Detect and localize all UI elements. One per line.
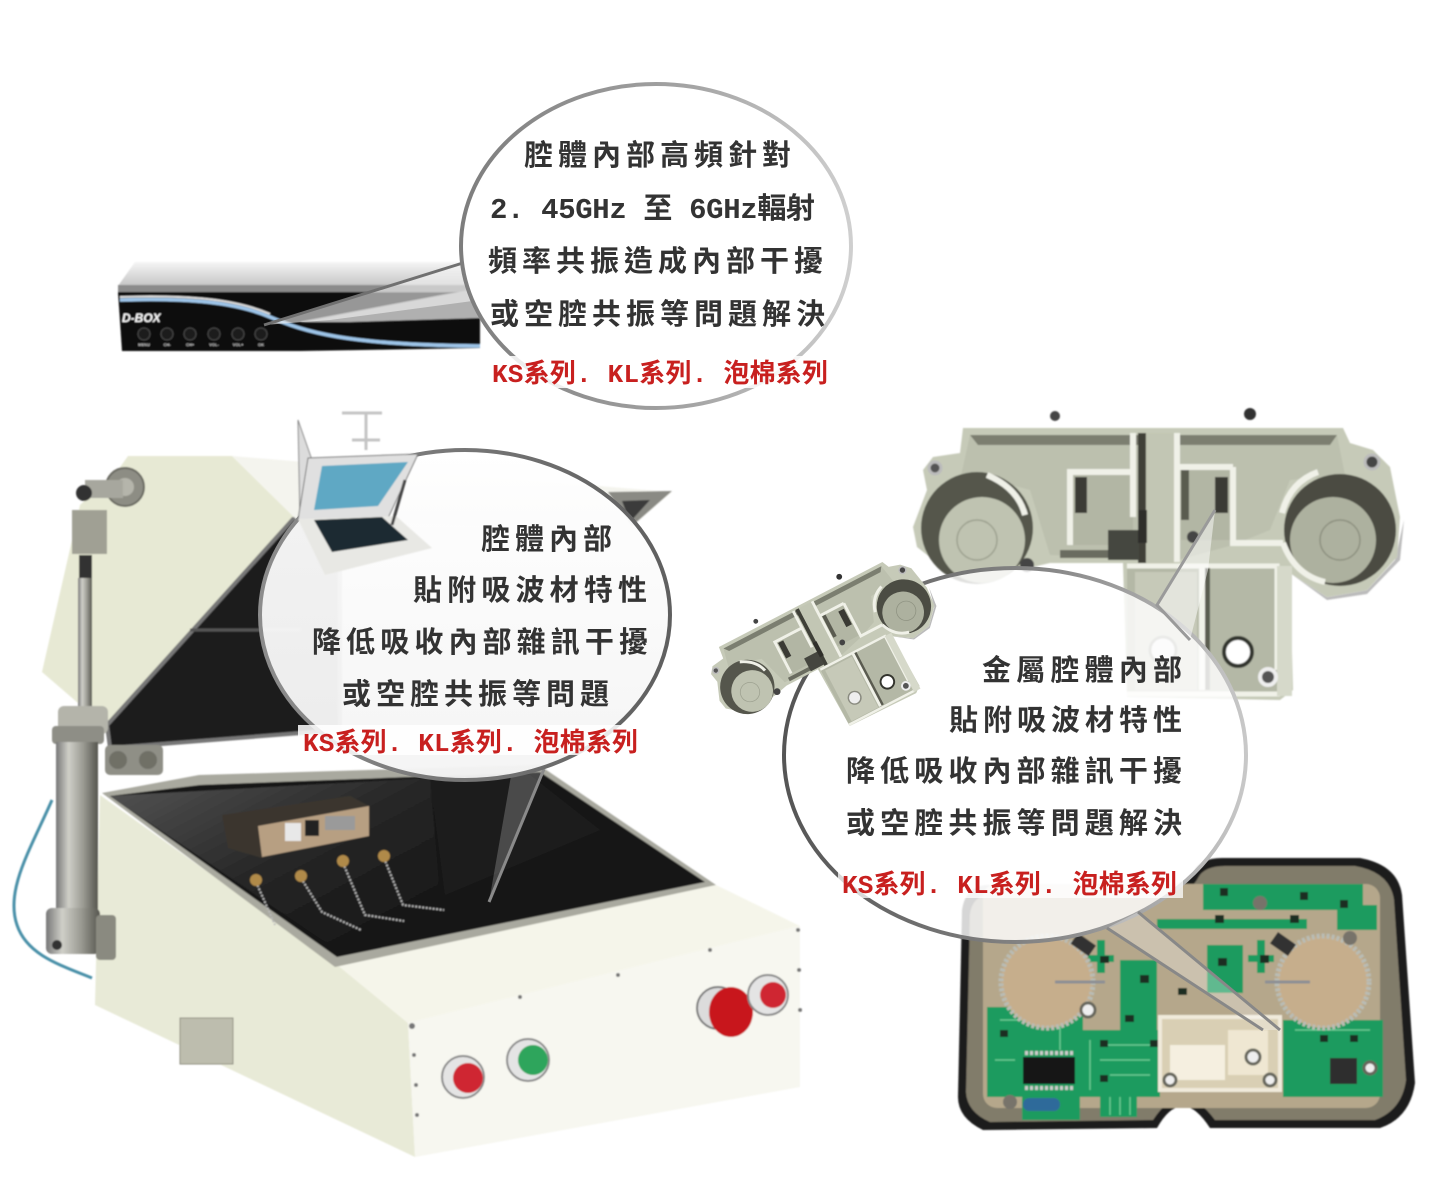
- body top surface: [335, 885, 800, 1023]
- bubble text: 2. 45GHz 至 6GHz輻射: [490, 192, 815, 227]
- callout: left speech bubble: [260, 413, 670, 902]
- bubble text: 頻率共振造成內部干擾: [488, 245, 823, 278]
- lid upper rim: [232, 456, 672, 530]
- band behind red text: [298, 725, 643, 755]
- button labels: CH-: [163, 342, 171, 347]
- body left side: [95, 795, 415, 1157]
- device in chamber: [222, 796, 369, 858]
- lid interior: [107, 519, 340, 748]
- bubble text: 腔體內部: [481, 523, 612, 556]
- bubble text: 或空腔共振等問題解決: [846, 807, 1182, 840]
- photo: metal cavity small: [693, 540, 970, 775]
- bubble text: 或空腔共振等問題: [342, 678, 609, 711]
- button labels: VOL+: [233, 342, 244, 347]
- bubble text: KS系列. KL系列. 泡棉系列: [303, 728, 638, 759]
- highlight band behind red text: [838, 868, 1183, 898]
- bubble text: 降低吸收內部雜訊干擾: [312, 626, 648, 659]
- housing frame: [958, 858, 1415, 1130]
- bubble text: 貼附吸波材特性: [949, 704, 1182, 737]
- bubble text: KS系列. KL系列. 泡棉系列: [842, 870, 1177, 901]
- board base: [983, 884, 1380, 1108]
- bubble text: [303, 523, 648, 759]
- traces detail: [995, 1020, 1370, 1115]
- round cavities: [1001, 936, 1369, 1028]
- photo: set-top box: [118, 262, 480, 351]
- vent plate: [180, 1018, 233, 1064]
- lid hinge bracket: [105, 745, 163, 775]
- logo: D-BOX: [122, 311, 162, 325]
- bubble text: [488, 139, 828, 390]
- button labels: [138, 342, 264, 347]
- callout: top speech bubble: [264, 84, 851, 408]
- button labels: MENU: [138, 342, 150, 347]
- buttons: [138, 328, 267, 340]
- capacitor: [1023, 1098, 1060, 1111]
- blue air hose: [14, 800, 92, 978]
- chamber interior: [110, 772, 705, 957]
- green traces: [987, 884, 1383, 1120]
- photo: RF circuit board in housing: [958, 858, 1415, 1130]
- button: red right: [748, 975, 788, 1015]
- button: green: [507, 1039, 549, 1081]
- upper tail to metal cavity: [1157, 510, 1215, 640]
- housing bevel: [966, 866, 1406, 1122]
- bubble text: 腔體內部高頻針對: [524, 139, 791, 172]
- photo: benchtop shield box inset: [298, 413, 432, 575]
- button labels: CH+: [186, 342, 195, 347]
- screws: [409, 928, 802, 1117]
- button: emergency stop: [697, 987, 753, 1037]
- bubble text: [842, 654, 1182, 901]
- lid side panel: [42, 456, 296, 728]
- button: red left: [442, 1056, 484, 1098]
- button labels: VOL-: [209, 342, 219, 347]
- callout: right speech bubble: [784, 510, 1280, 1030]
- photo: shielding test chamber: [14, 456, 802, 1157]
- small parts: [1000, 888, 1358, 1082]
- bubble body: [461, 84, 851, 408]
- button labels: OK: [258, 342, 264, 347]
- bubble tail: [489, 769, 544, 902]
- band behind red text: [486, 356, 832, 388]
- lower tail to circuit board: [1107, 912, 1280, 1030]
- bubble tail: [264, 262, 480, 325]
- center shielded section: [1160, 1017, 1280, 1090]
- bubble body: [784, 568, 1246, 942]
- bubble body: [260, 450, 670, 780]
- bubble text: 降低吸收內部雜訊干擾: [846, 755, 1182, 788]
- chamber opening rim: [102, 765, 716, 967]
- bubble text: KS系列. KL系列. 泡棉系列: [492, 359, 828, 390]
- bubble text: 金屬腔體內部: [982, 654, 1182, 687]
- body front panel: [408, 926, 800, 1157]
- bubble text: 或空腔共振等問題解決: [490, 298, 825, 331]
- connectors and chains: [256, 858, 444, 930]
- chips: [1023, 1057, 1075, 1084]
- holes: [1081, 1003, 1376, 1086]
- photo: metal cavity large: [913, 408, 1404, 700]
- bubble text: 貼附吸波材特性: [413, 574, 647, 607]
- piston cylinder: [46, 468, 144, 960]
